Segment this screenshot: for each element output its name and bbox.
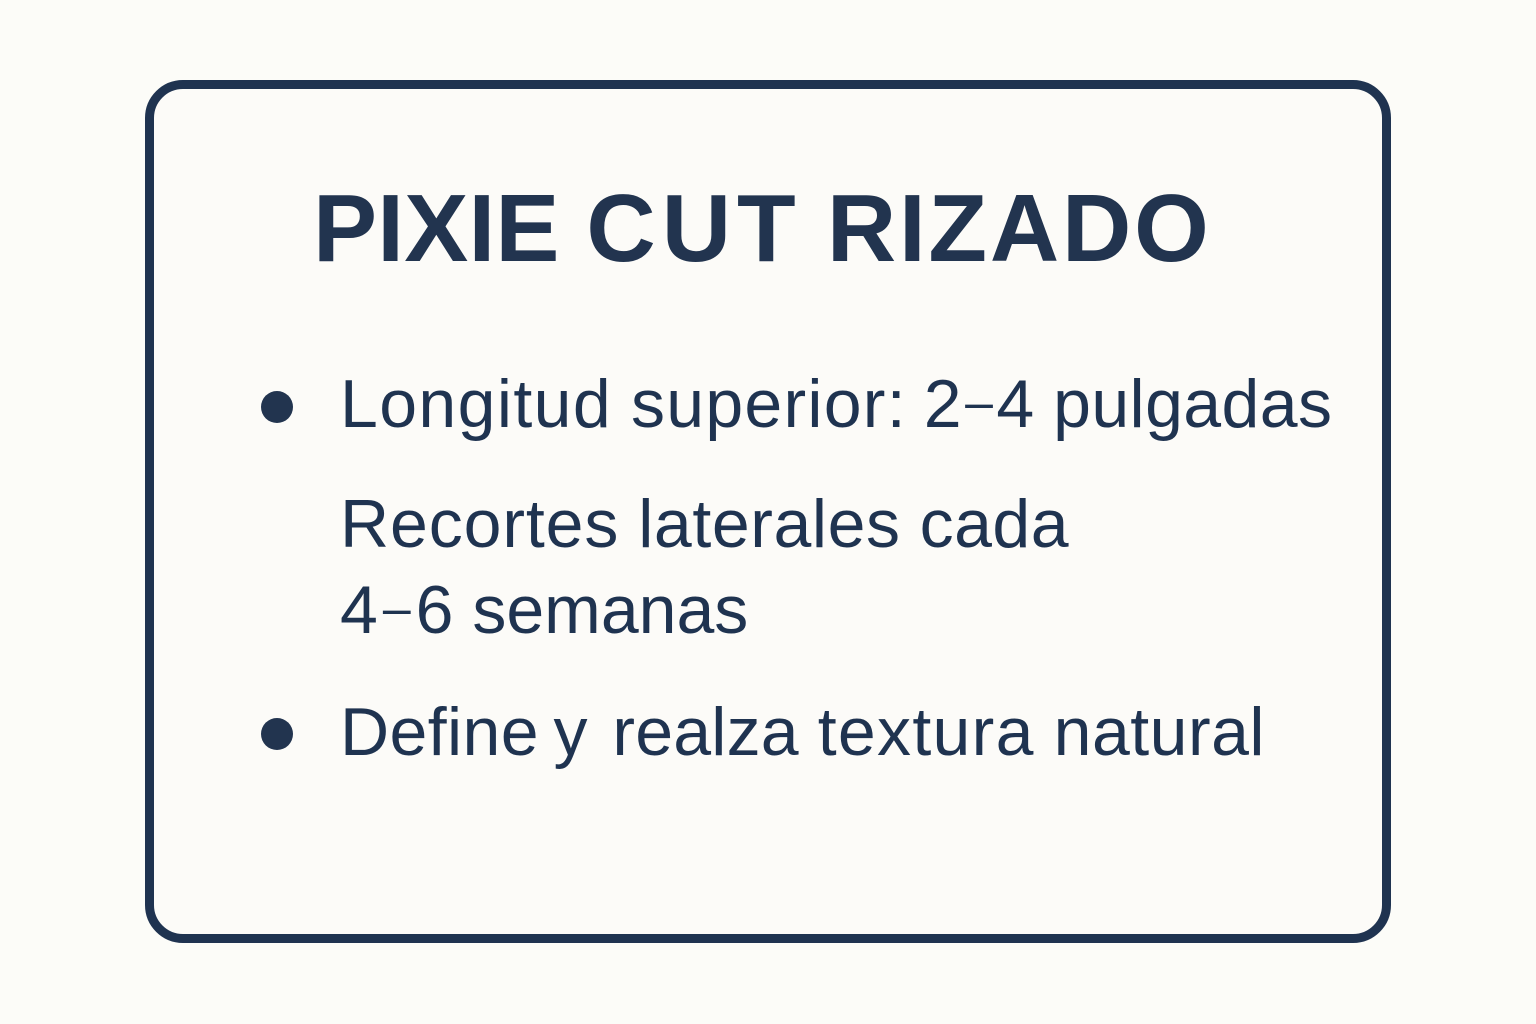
text: define y realza: Define y realza textura natural [340,694,1265,770]
panel: card [145,80,1391,943]
title: PIXIE CUT RIZADO [313,175,1212,282]
bullet icon 2 [261,718,293,750]
text: longitud superior: Longitud superior: 2–4 pulgadas [340,366,1332,442]
text: recortes laterales: Recortes laterales cada [340,486,1069,562]
text: semanas: 4–6 semanas [340,572,748,648]
bullet icon 1 [261,391,293,423]
